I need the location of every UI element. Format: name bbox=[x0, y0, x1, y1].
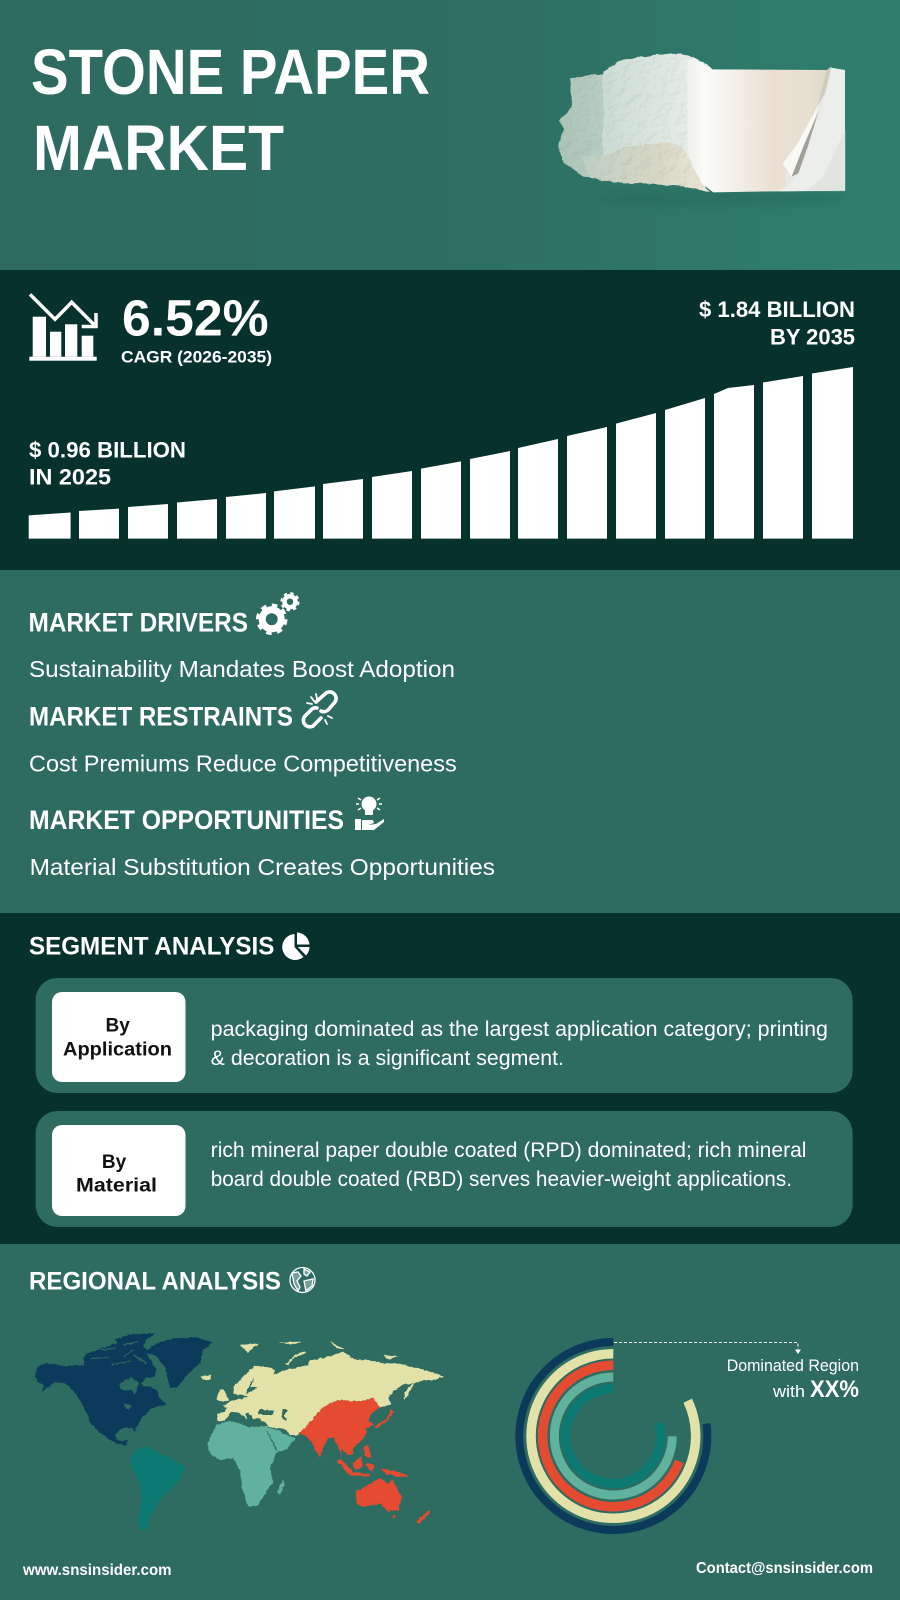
title: MARKET bbox=[33, 112, 284, 184]
map: africa and middle east bbox=[207, 1421, 296, 1507]
icon: pie chart bbox=[282, 932, 310, 960]
icon: chart bbox=[29, 294, 97, 361]
2035 value bbox=[699, 297, 855, 350]
CAGR value: 6.52% bbox=[122, 290, 269, 347]
icon: broken chain bbox=[303, 692, 336, 727]
panel: regional analysis bbox=[29, 1267, 859, 1530]
world map bbox=[35, 1333, 444, 1530]
text: application: packaging dominated as the largest application category; printing bbox=[211, 1018, 828, 1041]
CAGR label: CAGR (2026-2035) bbox=[121, 348, 272, 366]
title bbox=[31, 36, 430, 184]
panel: segment analysis bbox=[0, 913, 900, 1244]
label box: by material: Material bbox=[76, 1176, 157, 1197]
2035 value: $ 1.84 BILLION bbox=[699, 297, 855, 322]
2035 value: BY 2035 bbox=[770, 325, 855, 350]
text: material bbox=[211, 1139, 806, 1191]
heading: market restraints: MARKET RESTRAINTS bbox=[29, 702, 293, 732]
card: by application bbox=[36, 978, 853, 1093]
arrow: dominated region pointer bbox=[614, 1342, 801, 1354]
heading: segment analysis: SEGMENT ANALYSIS bbox=[29, 932, 274, 960]
text: material: board double coated (RBD) serves heavier-weight applications. bbox=[211, 1168, 792, 1191]
card: by material bbox=[36, 1111, 853, 1227]
heading: market drivers: MARKET DRIVERS bbox=[28, 608, 248, 638]
map: south america bbox=[131, 1446, 185, 1530]
callout: dominated region: with bbox=[772, 1383, 805, 1401]
callout: dominated region: XX% bbox=[810, 1376, 859, 1403]
callout: dominated region bbox=[727, 1357, 859, 1403]
footer: website: www.snsinsider.com bbox=[22, 1562, 172, 1579]
2025 value: $ 0.96 BILLION bbox=[29, 438, 186, 462]
label box: by application bbox=[52, 992, 186, 1082]
2025 value bbox=[29, 438, 186, 490]
label box: by material: By bbox=[102, 1152, 127, 1173]
label box: by application: By bbox=[106, 1016, 130, 1037]
label box: by material bbox=[52, 1125, 186, 1216]
text: application bbox=[211, 1018, 828, 1070]
icon: gears bbox=[258, 593, 298, 633]
2025 value: IN 2025 bbox=[29, 465, 111, 490]
title: STONE PAPER bbox=[31, 36, 430, 108]
footer: contact: Contact@snsinsider.com bbox=[696, 1560, 873, 1577]
panel: market size bbox=[0, 270, 900, 570]
radial chart bbox=[519, 1342, 707, 1530]
text: material: rich mineral paper double coated (RPD) dominated; rich mineral bbox=[211, 1139, 806, 1162]
illustration: torn paper bbox=[558, 53, 847, 205]
text: restraints: Cost Premiums Reduce Competitiveness bbox=[29, 750, 457, 776]
callout: dominated region: Dominated Region bbox=[727, 1357, 859, 1375]
map: asia pacific bbox=[299, 1398, 430, 1524]
panel: market dynamics bbox=[28, 593, 495, 880]
map: europe and north asia bbox=[200, 1342, 444, 1435]
text: drivers: Sustainability Mandates Boost Adoption bbox=[29, 656, 455, 682]
heading: market opportunities: MARKET OPPORTUNITIES bbox=[29, 805, 344, 835]
text: application: & decoration is a significant segment. bbox=[211, 1047, 564, 1070]
label box: by application: Application bbox=[63, 1040, 172, 1061]
panel: header bbox=[0, 0, 900, 270]
icon: bulb in hand bbox=[355, 796, 384, 830]
icon: globe bbox=[290, 1268, 315, 1292]
map: north america bbox=[35, 1333, 213, 1445]
bar chart bbox=[29, 367, 853, 539]
heading: regional analysis: REGIONAL ANALYSIS bbox=[29, 1267, 281, 1295]
text: opportunities: Material Substitution Creates Opportunities bbox=[30, 854, 495, 880]
